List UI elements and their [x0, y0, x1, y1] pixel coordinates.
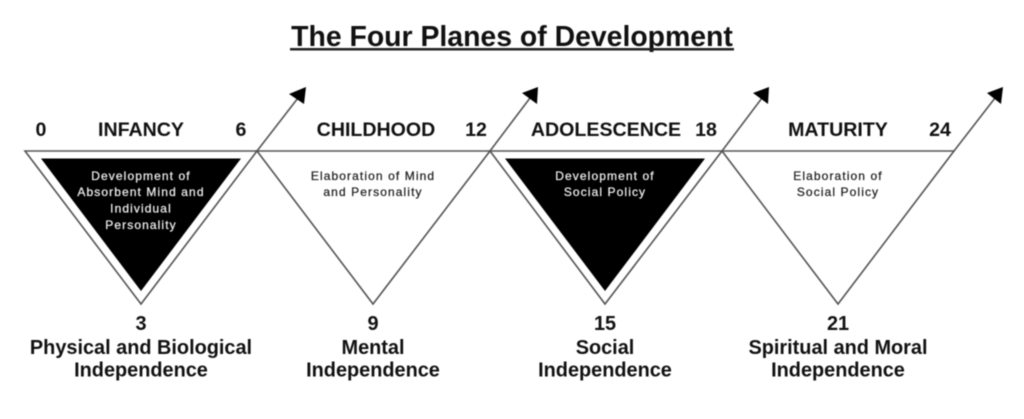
- triangle: childhood outline: [257, 151, 490, 304]
- label: physical independence: 3: [135, 313, 147, 335]
- label: spiritual and moral independence: Spiritual and Moral: [748, 337, 928, 359]
- description: infancy: Individual: [110, 202, 172, 216]
- label: social independence: 15: [594, 313, 616, 335]
- panel: infancy: [25, 87, 306, 382]
- panel: childhood: [257, 87, 538, 382]
- label: physical independence: Physical and Biological: [30, 337, 252, 359]
- triangle: adolescence black: [505, 158, 705, 291]
- description: maturity: Social Policy: [797, 185, 879, 199]
- description: infancy: Absorbent Mind and: [77, 185, 205, 199]
- age labels: infancy: 6: [236, 119, 247, 141]
- age labels: adolescence: 18: [695, 119, 717, 141]
- description: infancy: Development of: [91, 169, 191, 183]
- label: physical independence: [30, 313, 252, 382]
- age labels: adolescence: ADOLESCENCE: [531, 119, 681, 141]
- age labels: infancy: [36, 119, 247, 141]
- age labels: childhood: [317, 119, 487, 141]
- label: social independence: [538, 313, 672, 382]
- description: infancy: [77, 169, 205, 232]
- description: adolescence: [555, 169, 655, 199]
- age labels: maturity: 24: [929, 119, 951, 141]
- age labels: maturity: [788, 119, 951, 141]
- label: mental independence: Independence: [306, 360, 440, 382]
- triangle: maturity outline: [722, 151, 954, 304]
- label: social independence: Social: [576, 337, 634, 359]
- description: adolescence: Development of: [555, 169, 655, 183]
- age labels: childhood: 12: [465, 119, 487, 141]
- panel: maturity: [722, 87, 1003, 382]
- label: mental independence: [306, 313, 440, 382]
- description: childhood: Elaboration of Mind: [311, 169, 435, 183]
- arrow: maturity: [954, 87, 1003, 151]
- label: mental independence: Mental: [342, 337, 404, 359]
- arrow: adolescence: [722, 87, 769, 151]
- label: spiritual and moral independence: [748, 313, 928, 382]
- description: infancy: Personality: [105, 218, 177, 232]
- label: spiritual and moral independence: Independence: [771, 360, 905, 382]
- age labels: infancy: INFANCY: [98, 119, 184, 141]
- panel: adolescence: [490, 87, 769, 382]
- description: childhood: [311, 169, 435, 199]
- description: maturity: Elaboration of: [793, 169, 883, 183]
- age labels: childhood: CHILDHOOD: [317, 119, 435, 141]
- label: spiritual and moral independence: 21: [827, 313, 849, 335]
- triangle: infancy outline: [25, 151, 257, 304]
- arrow: childhood: [490, 87, 538, 151]
- label: physical independence: Independence: [74, 360, 208, 382]
- triangle: adolescence outline: [490, 151, 722, 304]
- triangle: infancy black: [41, 158, 241, 291]
- label: mental independence: 9: [367, 313, 379, 335]
- title: The Four Planes of Development: [291, 21, 733, 53]
- description: adolescence: Social Policy: [564, 185, 646, 199]
- age labels: infancy: 0: [36, 119, 47, 141]
- label: social independence: Independence: [538, 360, 672, 382]
- description: childhood: and Personality: [323, 185, 423, 199]
- arrow: infancy: [257, 87, 306, 151]
- age labels: maturity: MATURITY: [788, 119, 888, 141]
- description: maturity: [793, 169, 883, 199]
